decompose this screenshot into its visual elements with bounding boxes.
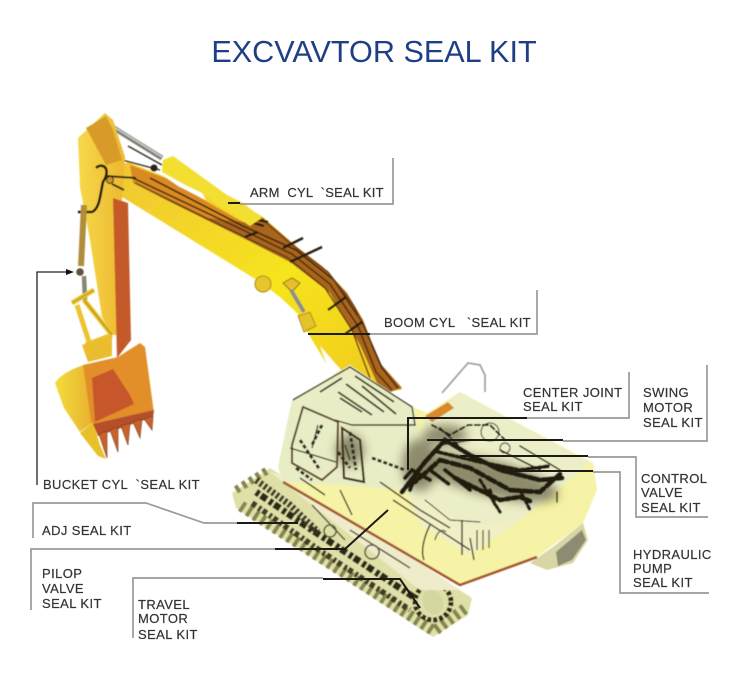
illustration: excavator <box>55 113 597 637</box>
label: pilot valve: SEAL KIT <box>42 596 102 611</box>
label: swing motor: SWING <box>643 385 689 400</box>
engine bay shading <box>336 425 562 512</box>
label: travel motor: TRAVEL <box>138 597 190 612</box>
label: control valve: CONTROL <box>641 471 707 486</box>
leader: swing motor <box>427 365 707 441</box>
handrail <box>442 363 485 393</box>
label: hydraulic pump <box>633 547 712 590</box>
label: adjuster: ADJ SEAL KIT <box>42 523 132 538</box>
label: control valve: VALVE <box>641 485 683 500</box>
lower frame <box>270 472 460 590</box>
leader: hydraulic pump <box>510 471 709 593</box>
cab details <box>296 425 405 480</box>
bucket teeth <box>99 416 153 458</box>
rear track <box>530 523 588 570</box>
lower frame sketch lines <box>306 495 410 568</box>
bucket <box>55 343 154 459</box>
engine bay machinery <box>402 423 562 522</box>
cab lines and roof <box>290 367 474 560</box>
upper body <box>278 365 597 585</box>
leader: center joint <box>408 372 629 470</box>
label: arm cylinder: ARM CYL `SEAL KIT <box>250 185 384 200</box>
leader: boom cylinder <box>308 290 537 334</box>
label: center joint: CENTER JOINT <box>523 385 622 400</box>
leader: bucket cylinder with arrow <box>37 269 74 485</box>
label: hydraulic pump: SEAL KIT <box>633 575 693 590</box>
label: hydraulic pump: HYDRAULIC <box>633 547 712 562</box>
title: EXCVAVTOR SEAL KIT <box>211 35 537 69</box>
bucket cylinder and linkage <box>72 205 112 362</box>
label: pilot valve <box>42 566 102 611</box>
label: center joint: SEAL KIT <box>523 399 583 414</box>
label: travel motor <box>138 597 198 642</box>
label: travel motor: MOTOR <box>138 611 188 626</box>
label: control valve: SEAL KIT <box>641 500 701 515</box>
label: pilot valve: VALVE <box>42 581 84 596</box>
label: center joint <box>523 385 622 414</box>
arm <box>78 113 136 358</box>
leader: control valve <box>460 456 708 517</box>
front track <box>232 468 472 637</box>
label: swing motor: MOTOR <box>643 400 693 415</box>
leader: arm cylinder <box>228 158 393 204</box>
label: swing motor: SEAL KIT <box>643 415 703 430</box>
label: swing motor <box>643 385 703 430</box>
label: pilot valve: PILOP <box>42 566 82 581</box>
label: control valve <box>641 471 707 515</box>
label: hydraulic pump: PUMP <box>633 561 672 576</box>
leader: pilot valve <box>31 510 388 610</box>
label: boom cylinder: BOOM CYL `SEAL KIT <box>384 315 531 330</box>
boom <box>108 162 402 392</box>
label: bucket cylinder: BUCKET CYL `SEAL KIT <box>43 477 200 492</box>
rear door vent <box>435 530 489 550</box>
arm cylinder <box>109 124 262 226</box>
leader: adjuster <box>33 503 298 538</box>
label: travel motor: SEAL KIT <box>138 627 198 642</box>
leader: travel motor <box>133 578 420 638</box>
